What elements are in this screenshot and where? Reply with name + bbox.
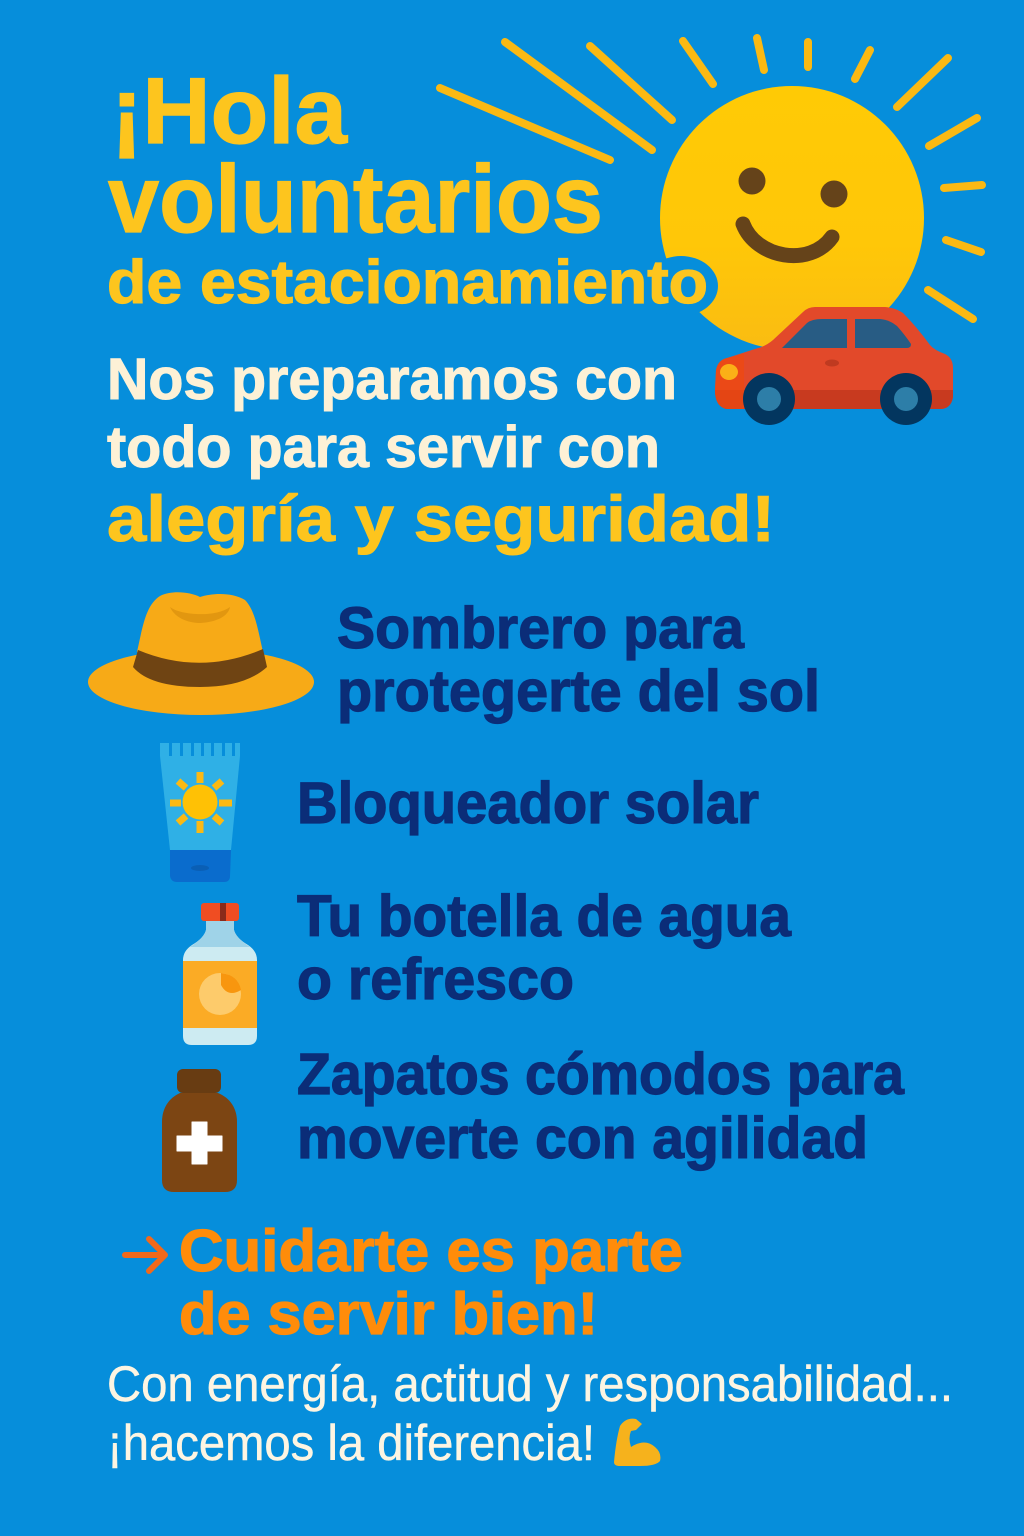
hat label bbox=[337, 596, 820, 724]
icon: red car bbox=[715, 307, 953, 425]
icon: hat bbox=[88, 592, 314, 715]
intro text: alegría y seguridad! bbox=[107, 482, 775, 555]
sunscreen label: Bloqueador solar bbox=[297, 771, 759, 836]
water bottle label: o refresco bbox=[297, 947, 574, 1012]
title: ¡Hola bbox=[111, 58, 348, 163]
callout bbox=[179, 1218, 683, 1347]
icon: medicine bottle bbox=[162, 1069, 237, 1192]
closing text: Con energía, actitud y responsabilidad... bbox=[107, 1356, 953, 1412]
hat label: Sombrero para bbox=[337, 596, 745, 661]
icon: sunscreen tube bbox=[160, 743, 240, 882]
arrow bbox=[125, 1239, 165, 1271]
title bbox=[107, 58, 708, 316]
shoes label: Zapatos cómodos para bbox=[297, 1042, 905, 1107]
callout: de servir bien! bbox=[179, 1281, 598, 1347]
title: voluntarios bbox=[108, 146, 603, 253]
hat label: protegerte del sol bbox=[337, 659, 820, 724]
closing text bbox=[107, 1356, 953, 1471]
shoes label: moverte con agilidad bbox=[297, 1106, 868, 1171]
intro text: todo para servir con bbox=[107, 415, 660, 480]
intro text bbox=[107, 347, 775, 555]
water bottle label bbox=[297, 884, 792, 1012]
callout: Cuidarte es parte bbox=[179, 1218, 683, 1284]
title: de estacionamiento bbox=[107, 248, 708, 316]
closing text: ¡hacemos la diferencia! bbox=[107, 1415, 595, 1471]
intro text: Nos preparamos con bbox=[107, 347, 677, 412]
icon: water bottle bbox=[183, 903, 257, 1045]
icon: smiling sun bbox=[440, 38, 982, 350]
water bottle label: Tu botella de agua bbox=[297, 884, 792, 949]
icon: flexed arm bbox=[614, 1419, 660, 1466]
shoes label bbox=[297, 1042, 905, 1171]
